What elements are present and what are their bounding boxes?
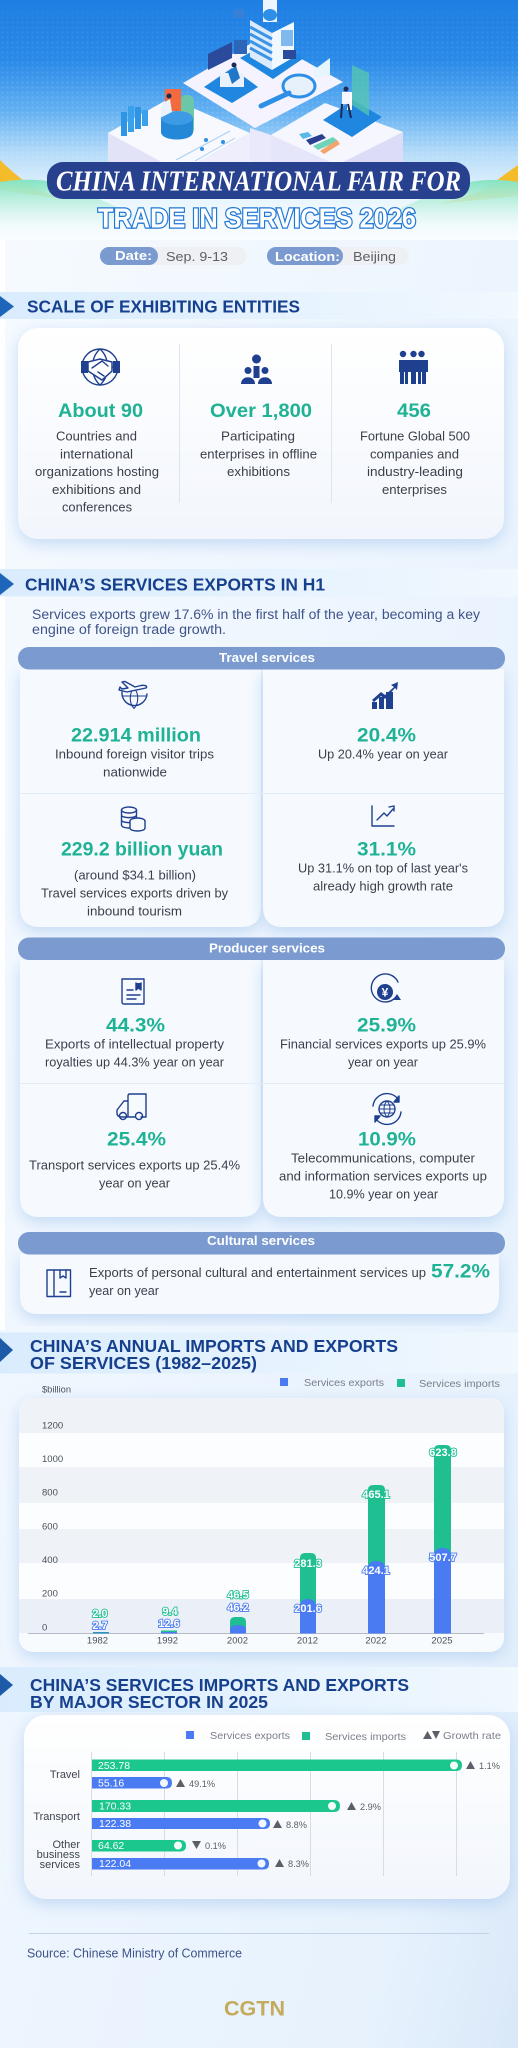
stat: 229.2 billion yuan: Travel services exports driven by <box>41 886 228 900</box>
stat: 10.9%: 10.9% <box>358 1130 416 1150</box>
bar 2025 <box>429 1445 457 1634</box>
y axis labels: 200 <box>42 1588 58 1600</box>
bars: other business services: 8.3% <box>288 1859 310 1870</box>
source note: Source: Chinese Ministry of Commerce <box>27 1946 242 1960</box>
cultural header bar: Cultural services <box>207 1234 315 1248</box>
stat: 20.4%: Up 20.4% year on year <box>318 746 449 762</box>
panel: producer services <box>18 938 505 1217</box>
category labels: business <box>37 1849 80 1861</box>
location pill: Beijing <box>353 249 396 264</box>
icon: group of people <box>241 354 272 384</box>
logo: CGTN: CGTN <box>224 1998 285 2020</box>
icon: three business people <box>399 351 428 384</box>
bars: transport: 8.8% <box>286 1820 308 1831</box>
legend: sector chart: Services imports <box>325 1731 406 1743</box>
category labels: Travel <box>50 1769 80 1781</box>
stat: 44.3% <box>45 1016 225 1070</box>
x axis labels: 2025 <box>431 1636 453 1646</box>
cultural text and stat: 57.2% <box>431 1262 490 1282</box>
stat: 456: companies and <box>370 446 459 462</box>
legend: annual chart <box>280 1377 500 1390</box>
legend: sector chart <box>186 1730 501 1743</box>
stat: 456: industry-leading <box>367 464 463 479</box>
bar 2025: 623.8 <box>429 1447 457 1459</box>
section heading: services exports in H1 <box>0 569 518 596</box>
stat: 20.4% <box>318 726 449 762</box>
stat: about 90: conferences <box>62 500 132 514</box>
stat: about 90: international <box>60 446 133 462</box>
section heading: services exports in H1: CHINA’S SERVICES EXPORTS IN H1 <box>25 574 325 594</box>
bars: other business services: 64.62 <box>98 1840 124 1852</box>
section heading: annual imports and exports: OF SERVICES (1982–2025) <box>30 1353 257 1373</box>
stat: 25.4%: Transport services exports up 25.4% <box>29 1158 240 1172</box>
bars: travel: 253.78 <box>98 1760 130 1772</box>
stat: 44.3%: royalties up 44.3% year on year <box>45 1054 225 1070</box>
bar 2012: 201.6 <box>294 1603 322 1615</box>
section heading: annual imports and exports: CHINA’S ANNUAL IMPORTS AND EXPORTS <box>30 1336 398 1356</box>
bars: transport: 170.33 <box>99 1800 131 1812</box>
panel: travel services <box>18 647 505 927</box>
icon: handshake globe <box>81 349 120 385</box>
stat: 44.3%: 44.3% <box>106 1016 165 1036</box>
icon: rising bars and arrow <box>372 682 398 709</box>
legend: annual chart: Services exports <box>304 1377 384 1389</box>
cultural text and stat: Exports of personal cultural and entertainment services up <box>89 1265 426 1280</box>
category labels: Other <box>52 1839 80 1851</box>
y axis labels: 600 <box>42 1522 58 1532</box>
stat: 22.914 million: 22.914 million <box>71 726 201 746</box>
title line 2: TRADE IN SERVICES 2026 <box>98 202 416 234</box>
stat: over 1,800: Over 1,800 <box>210 401 312 422</box>
stat: 456 <box>360 401 470 497</box>
icon: book box <box>47 1270 70 1296</box>
bar 1992: 12.6 <box>158 1618 180 1630</box>
stat: 25.4%: 25.4% <box>107 1130 166 1150</box>
y axis labels: 1200 <box>42 1420 63 1432</box>
icon: yuan cycle <box>371 974 401 1002</box>
stat: 229.2 billion yuan: (around $34.1 billion) <box>74 868 196 882</box>
icon: document <box>122 979 144 1004</box>
stat: over 1,800 <box>200 401 317 479</box>
icon: delivery truck <box>117 1094 146 1120</box>
travel header bar <box>18 647 505 670</box>
stat: 456: 456 <box>397 401 431 422</box>
bars: travel <box>92 1760 501 1790</box>
stat: 229.2 billion yuan: 229.2 billion yuan <box>61 840 223 860</box>
stat: about 90 <box>35 401 159 514</box>
bars: travel: 1.1% <box>479 1761 501 1772</box>
bar 2002: 46.5 <box>227 1590 249 1602</box>
stat: 25.4%: year on year <box>99 1176 171 1190</box>
intro text <box>32 607 480 637</box>
section heading: scale of exhibiting entities <box>0 292 518 319</box>
bar 2002 <box>227 1590 249 1634</box>
stat: over 1,800: Participating <box>221 428 295 444</box>
bar 1992: 9.4 <box>162 1606 179 1618</box>
legend: annual chart: Services imports <box>419 1378 500 1390</box>
stat: about 90: organizations hosting <box>35 464 159 479</box>
icon: network globe cycle <box>373 1094 401 1124</box>
x axis labels: 2022 <box>365 1636 387 1646</box>
category labels: services <box>40 1859 80 1871</box>
stat: about 90: About 90 <box>58 401 143 422</box>
y axis labels: 400 <box>42 1555 58 1566</box>
stat: 31.1%: already high growth rate <box>313 878 453 894</box>
bars: transport: 122.38 <box>99 1818 131 1830</box>
bars: other business services: 122.04 <box>99 1858 131 1870</box>
legend: sector chart: Services exports <box>210 1730 290 1742</box>
bar 1992 <box>158 1606 180 1634</box>
stat: 25.4% <box>29 1130 240 1190</box>
x axis labels <box>87 1636 453 1646</box>
stat: 10.9%: and information services exports up <box>279 1168 487 1184</box>
stat: about 90: Countries and <box>56 428 137 444</box>
category labels: Transport <box>33 1811 80 1823</box>
bars: transport: 2.9% <box>360 1802 382 1813</box>
section heading: major sector: BY MAJOR SECTOR IN 2025 <box>30 1692 268 1712</box>
stat: 25.9% <box>280 1016 486 1070</box>
icon: plane and globe <box>119 682 147 708</box>
title line 1 pill: CHINA INTERNATIONAL FAIR FOR <box>56 166 461 198</box>
bar 2025: 507.7 <box>429 1552 457 1564</box>
header banner <box>0 0 518 265</box>
section heading: annual imports and exports <box>0 1332 518 1374</box>
bar 2012: 281.3 <box>294 1558 322 1570</box>
stat: 456: Fortune Global 500 <box>360 428 470 444</box>
date pill: Sep. 9-13 <box>166 249 228 264</box>
bars: other business services <box>92 1840 310 1870</box>
unit label: $billion <box>42 1384 71 1396</box>
bar 2002: 46.2 <box>227 1602 249 1614</box>
location pill: Location: <box>275 249 340 264</box>
category labels <box>33 1769 80 1871</box>
panel: horizontal bar chart by sector <box>24 1715 510 1899</box>
stat: 10.9%: 10.9% year on year <box>329 1186 439 1202</box>
stat: over 1,800: exhibitions <box>227 464 291 479</box>
section heading: major sector <box>0 1667 518 1712</box>
date pill: Date: <box>115 248 152 263</box>
y axis labels: 1000 <box>42 1454 63 1465</box>
stat: 229.2 billion yuan: inbound tourism <box>87 904 182 918</box>
stacked bar chart: annual services trade <box>19 1398 504 1652</box>
bars: travel: 49.1% <box>189 1779 216 1790</box>
illustration: isometric platforms <box>108 0 403 172</box>
y axis labels <box>42 1420 63 1634</box>
stat: 22.914 million: nationwide <box>103 764 167 780</box>
y axis labels: 0 <box>42 1622 47 1634</box>
stat: 10.9%: Telecommunications, computer <box>291 1150 476 1166</box>
intro text: Services exports grew 17.6% in the first half of the year, becoming a key <box>32 607 480 622</box>
stat: 31.1%: 31.1% <box>357 840 416 860</box>
x axis labels: 1982 <box>87 1636 108 1646</box>
stat: 25.9%: 25.9% <box>357 1016 416 1036</box>
stat: 22.914 million: Inbound foreign visitor trips <box>55 746 214 762</box>
stat: 22.914 million <box>55 726 214 780</box>
stat: 25.9%: Financial services exports up 25.9% <box>280 1036 486 1052</box>
icon: coins <box>122 807 145 831</box>
section heading: scale of exhibiting entities: SCALE OF EXHIBITING ENTITIES <box>27 296 300 316</box>
stat: 456: enterprises <box>382 482 448 497</box>
icon: yuan cycle: ¥ <box>382 986 389 1000</box>
intro text: engine of foreign trade growth. <box>32 622 226 637</box>
legend: sector chart: Growth rate <box>443 1730 501 1742</box>
stat: 229.2 billion yuan <box>41 840 228 918</box>
x axis labels: 1992 <box>157 1636 178 1646</box>
date pill <box>100 247 247 265</box>
bar 2022: 424.1 <box>362 1565 390 1577</box>
icon: line chart <box>372 806 394 826</box>
bars: travel: 55.16 <box>98 1778 124 1790</box>
bar 2022 <box>362 1485 390 1634</box>
y axis labels: 800 <box>42 1488 58 1498</box>
bar 2012 <box>294 1553 322 1634</box>
bar 2022: 465.1 <box>362 1489 390 1501</box>
cultural text and stat: year on year <box>89 1283 160 1298</box>
producer header bar: Producer services <box>209 942 325 956</box>
producer header bar <box>18 938 505 960</box>
bars: transport <box>92 1800 382 1831</box>
bar 1982 <box>92 1608 109 1634</box>
stat: 44.3%: Exports of intellectual property <box>45 1036 225 1052</box>
cultural header bar <box>18 1232 505 1254</box>
stat: 31.1% <box>298 840 468 894</box>
x axis labels: 2012 <box>297 1636 318 1646</box>
bar 1982: 2.0 <box>92 1608 108 1620</box>
stat: 31.1%: Up 31.1% on top of last year's <box>298 860 468 876</box>
stat: 20.4%: 20.4% <box>357 726 416 746</box>
stat: 10.9% <box>279 1130 487 1202</box>
travel header bar: Travel services <box>219 651 315 665</box>
bars: other business services: 0.1% <box>205 1841 227 1852</box>
stat: 25.9%: year on year <box>348 1054 419 1070</box>
location pill <box>267 247 409 265</box>
section heading: major sector: CHINA’S SERVICES IMPORTS AND EXPORTS <box>30 1675 409 1695</box>
panel: cultural services <box>18 1232 505 1314</box>
x axis labels: 2002 <box>227 1636 248 1646</box>
panel: scale of exhibiting entities <box>18 328 504 539</box>
bar 1982: 2.7 <box>92 1620 108 1632</box>
cultural text and stat <box>89 1262 490 1298</box>
stat: about 90: exhibitions and <box>52 482 141 497</box>
stat: over 1,800: enterprises in offline <box>200 446 317 462</box>
